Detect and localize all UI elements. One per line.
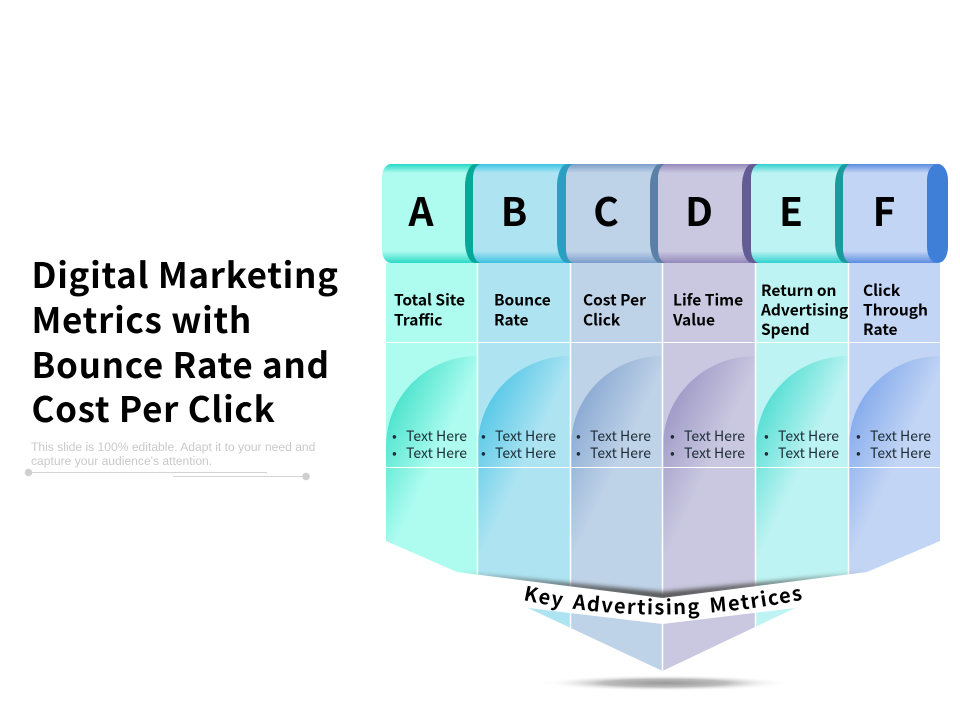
tab F [843,164,948,263]
column headings: Value [672,308,715,330]
shadow along arrow edge [458,573,867,600]
bullet lists [392,426,931,463]
bullet lists: Text Here [590,426,651,446]
bullet lists: • [856,426,861,446]
column headings: Through [863,298,928,320]
column headings: Rate [494,308,529,330]
column headings: Total Site [394,288,465,310]
panel: column A [386,263,478,575]
tab row [382,164,948,263]
column headings: Life Time [673,288,743,310]
column headings: Bounce [494,288,551,310]
tab letters: F [873,182,895,238]
bullet lists: • [576,426,581,446]
bullet lists: Text Here [495,443,556,463]
panel: column F [849,263,940,574]
title: Metrics with [32,293,252,344]
bullet lists: Text Here [684,426,745,446]
tab B [473,164,587,263]
subtitle text [31,440,315,468]
bullet lists: Text Here [495,426,556,446]
subtitle text: This slide is 100% editable. Adapt it to your need and [31,440,315,454]
tab letters: D [685,182,713,238]
bullet lists: Text Here [590,443,651,463]
tab letters: A [408,182,434,238]
bullet lists: • [481,443,486,463]
bullet lists: • [481,426,486,446]
bullet lists: • [670,426,675,446]
bullet lists: Text Here [684,443,745,463]
title [32,248,339,433]
tab E [751,164,865,263]
bullet lists: Text Here [406,443,467,463]
title: Cost Per Click [32,382,275,433]
column headings: Click [863,279,901,301]
column headings: Advertising [760,298,848,320]
panel: column C [571,263,663,683]
bullet lists: Text Here [778,426,839,446]
bullet lists: Text Here [870,443,931,463]
column headings: Click [583,308,621,330]
column headings: Rate [863,318,898,340]
bullet lists: • [764,426,769,446]
tab C [566,164,680,263]
tab letters: C [593,182,619,238]
bullet lists: • [576,443,581,463]
bullet lists: • [670,443,675,463]
title: Digital Marketing [32,248,339,299]
panel: column B [478,263,571,628]
column headings: Return on [761,279,836,301]
tab letters [408,182,895,238]
tab letters: B [501,182,527,238]
panel: column E [756,263,849,626]
floor shadow [540,675,790,691]
subtitle text: capture your audience's attention. [31,454,212,468]
column headings: Spend [761,318,810,340]
tab A [382,164,495,263]
panel: column D [663,263,756,683]
bullet lists: • [764,443,769,463]
bullet lists: • [392,426,397,446]
title: Bounce Rate and [32,338,330,389]
column headings: Cost Per [583,288,646,310]
bullet lists: Text Here [406,426,467,446]
bullet lists: Text Here [870,426,931,446]
arrow-shaped column panel [386,263,940,683]
curved label: Key Advertising Metrices [524,586,802,619]
tab letters: E [779,182,803,238]
column headings [394,279,928,340]
tab D [658,164,772,263]
decorative connector lines with dots [25,469,310,480]
bullet lists: • [392,443,397,463]
column headings: Traffic [394,308,442,330]
bullet lists: Text Here [778,443,839,463]
bullet lists: • [856,443,861,463]
